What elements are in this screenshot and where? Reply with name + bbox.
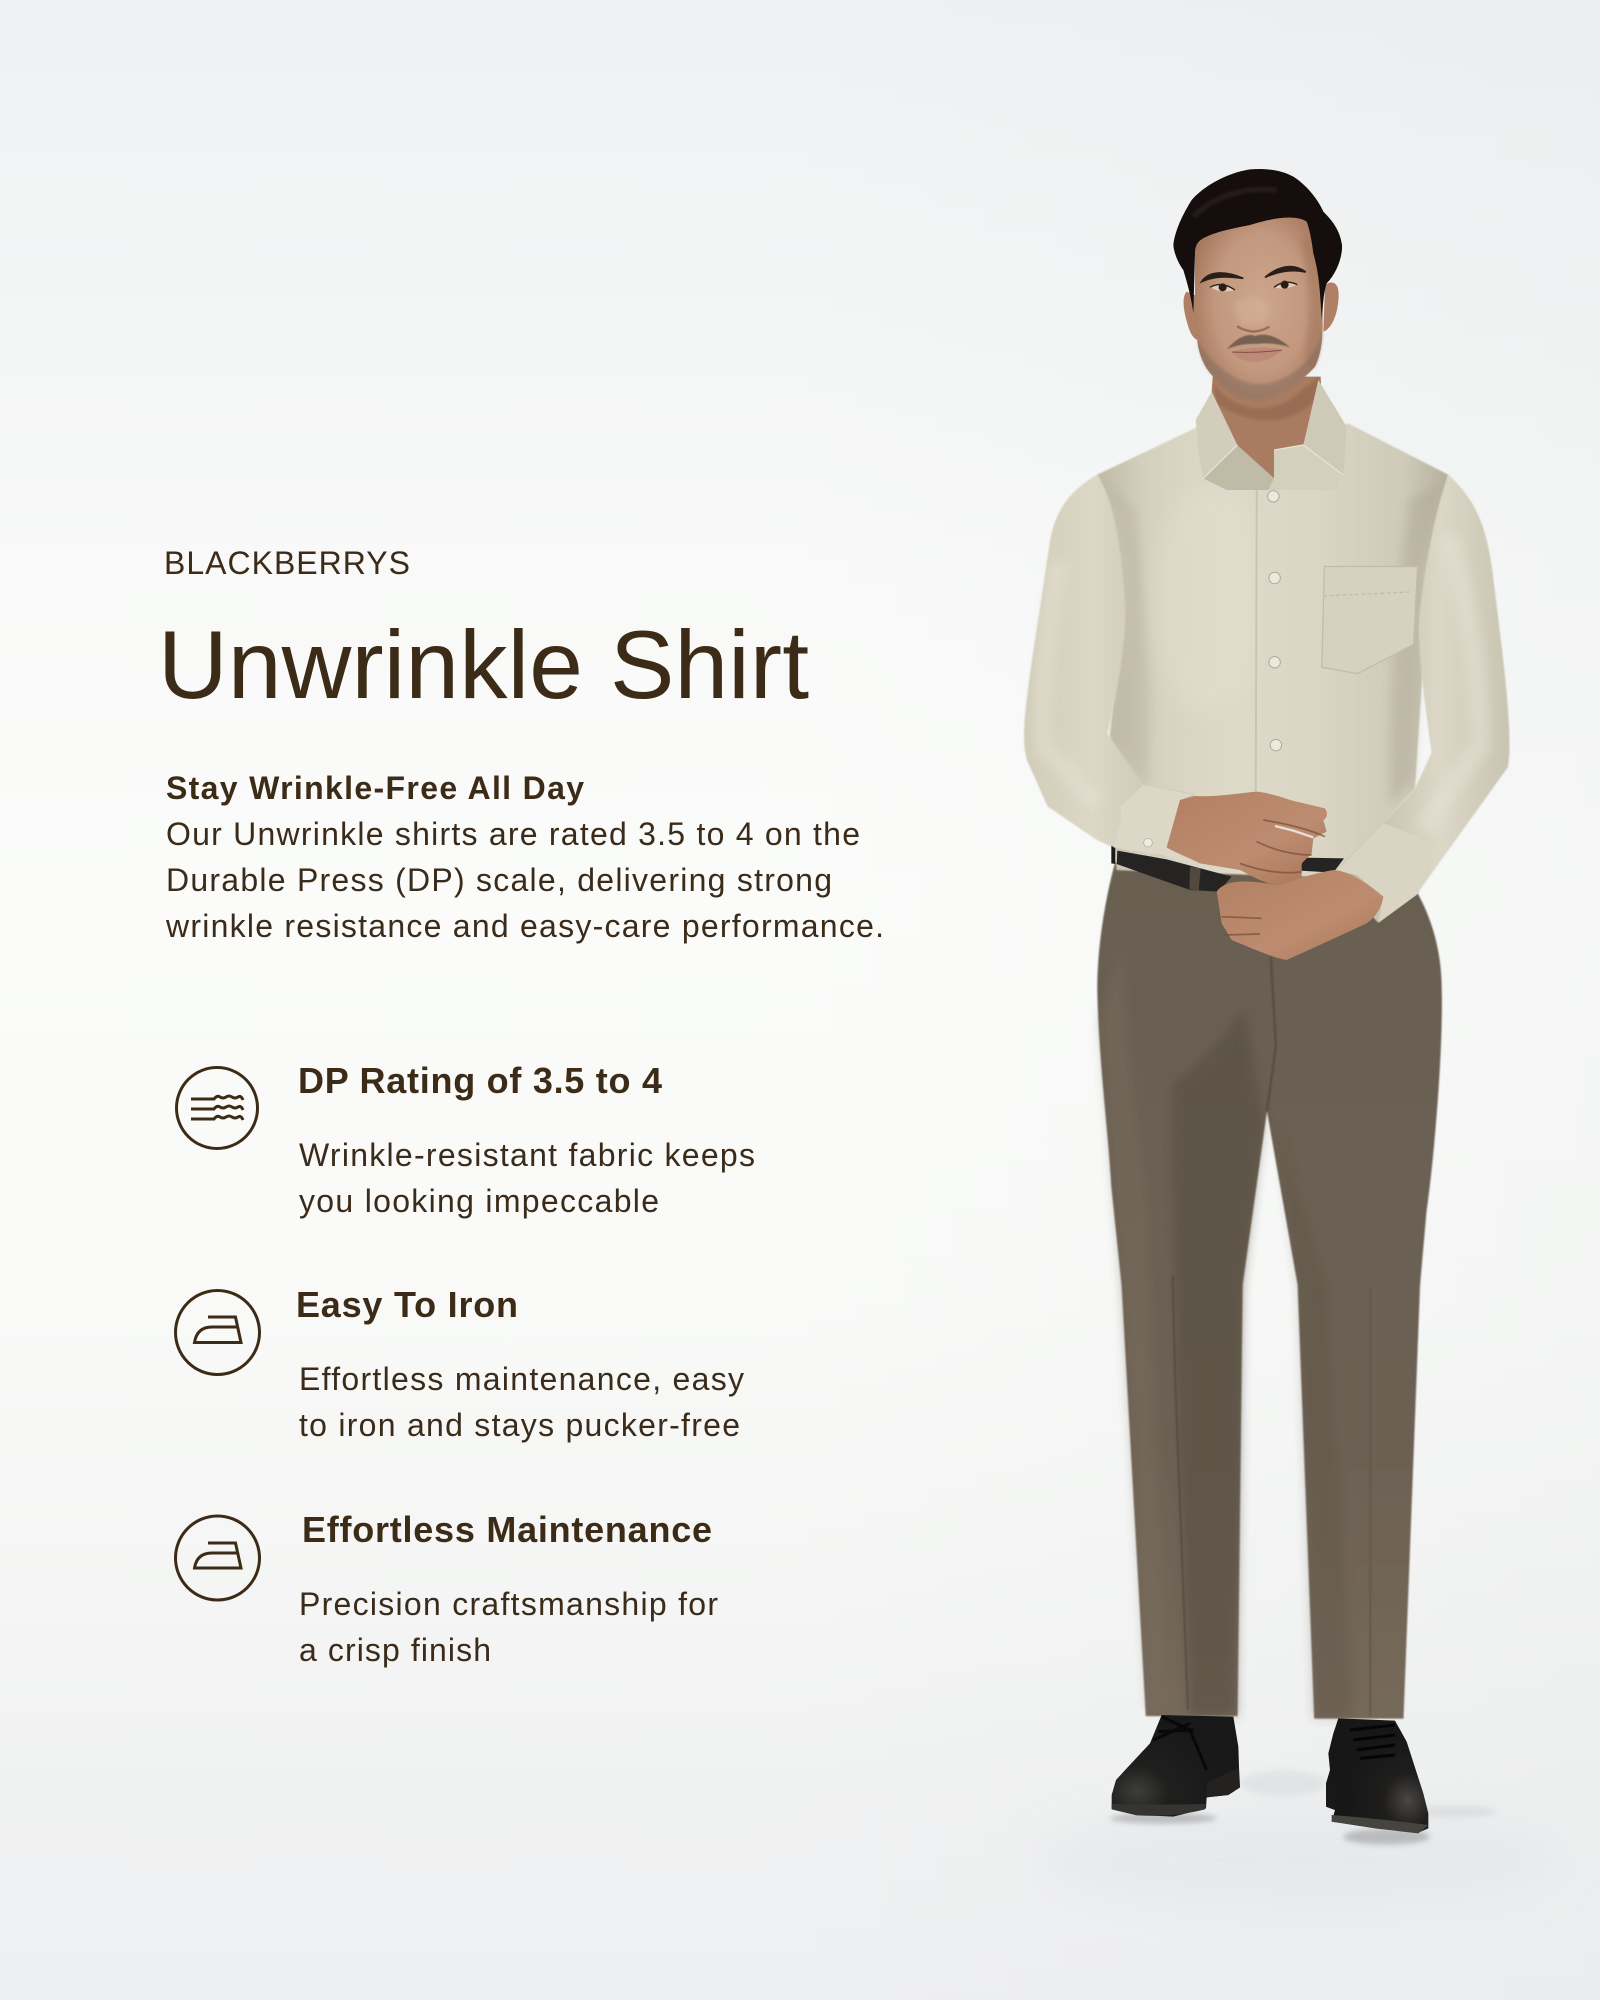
mouth bbox=[1232, 347, 1282, 362]
heading: Effortless Maintenance bbox=[302, 1509, 712, 1550]
right cuff bbox=[1337, 823, 1434, 923]
intro text block bbox=[165, 770, 884, 944]
intro paragraph: Our Unwrinkle shirts are rated 3.5 to 4 on the bbox=[166, 816, 860, 852]
eyes bbox=[1210, 281, 1297, 291]
description: Wrinkle-resistant fabric keeps bbox=[299, 1137, 755, 1173]
icon: fabric waves bbox=[176, 1068, 258, 1148]
description: a crisp finish bbox=[299, 1632, 491, 1668]
right shoe bbox=[1326, 1718, 1428, 1833]
upper hand bbox=[1167, 792, 1327, 885]
pants waist shadow bbox=[1378, 894, 1418, 923]
heading: DP Rating of 3.5 to 4 bbox=[298, 1060, 662, 1101]
icon: iron bbox=[176, 1290, 260, 1374]
arm highlights bbox=[1423, 536, 1480, 829]
neck bbox=[1212, 377, 1323, 478]
hair bbox=[1173, 169, 1342, 320]
shirt folds bbox=[1100, 475, 1151, 791]
icon: iron bbox=[176, 1516, 260, 1600]
description: Effortless maintenance, easy bbox=[299, 1361, 744, 1397]
right sleeve bbox=[1337, 475, 1509, 922]
left shoe bbox=[1112, 1715, 1240, 1817]
face bbox=[1195, 207, 1323, 400]
heading: Easy To Iron bbox=[296, 1284, 518, 1325]
description: you looking impeccable bbox=[299, 1183, 659, 1219]
title: Unwrinkle Shirt bbox=[158, 612, 809, 719]
feature: easy to iron bbox=[176, 1284, 744, 1443]
shirt buttons bbox=[1268, 491, 1282, 751]
description bbox=[299, 1137, 755, 1219]
face side shadow bbox=[1300, 237, 1321, 366]
nose bbox=[1237, 326, 1269, 332]
intro paragraph: Durable Press (DP) scale, delivering strong bbox=[166, 862, 832, 898]
ring highlight bbox=[1275, 826, 1313, 837]
stubble bbox=[1197, 330, 1323, 400]
brand label: BLACKBERRYS bbox=[164, 545, 410, 581]
belt bbox=[1111, 785, 1434, 960]
hair sheen bbox=[1193, 189, 1277, 217]
shoe shadows bbox=[1110, 1813, 1430, 1845]
intro heading: Stay Wrinkle-Free All Day bbox=[166, 770, 584, 806]
intro paragraph bbox=[165, 816, 884, 944]
moustache bbox=[1227, 335, 1290, 349]
feature: DP rating bbox=[176, 1060, 755, 1219]
collar bbox=[1196, 380, 1347, 490]
finger lines bbox=[1222, 820, 1325, 935]
intro paragraph: wrinkle resistance and easy-care performance. bbox=[165, 908, 884, 944]
shirt pocket bbox=[1322, 566, 1418, 674]
left sleeve bbox=[1024, 475, 1194, 857]
description bbox=[299, 1361, 744, 1443]
trousers bbox=[1097, 863, 1442, 1719]
lower hand bbox=[1217, 870, 1383, 960]
shoes bbox=[1110, 1715, 1497, 1845]
torso bbox=[1024, 424, 1509, 922]
photo: man standing in shirt and trousers bbox=[1024, 169, 1509, 1845]
shirt placket bbox=[1255, 482, 1257, 868]
head bbox=[1173, 169, 1347, 490]
cuff button bbox=[1144, 838, 1152, 847]
description bbox=[299, 1586, 718, 1668]
ears bbox=[1184, 292, 1198, 340]
eyebrows bbox=[1202, 267, 1306, 282]
description: to iron and stays pucker-free bbox=[299, 1407, 740, 1443]
left cuff bbox=[1113, 785, 1200, 865]
description: Precision craftsmanship for bbox=[299, 1586, 718, 1622]
feature: effortless maintenance bbox=[176, 1509, 718, 1668]
